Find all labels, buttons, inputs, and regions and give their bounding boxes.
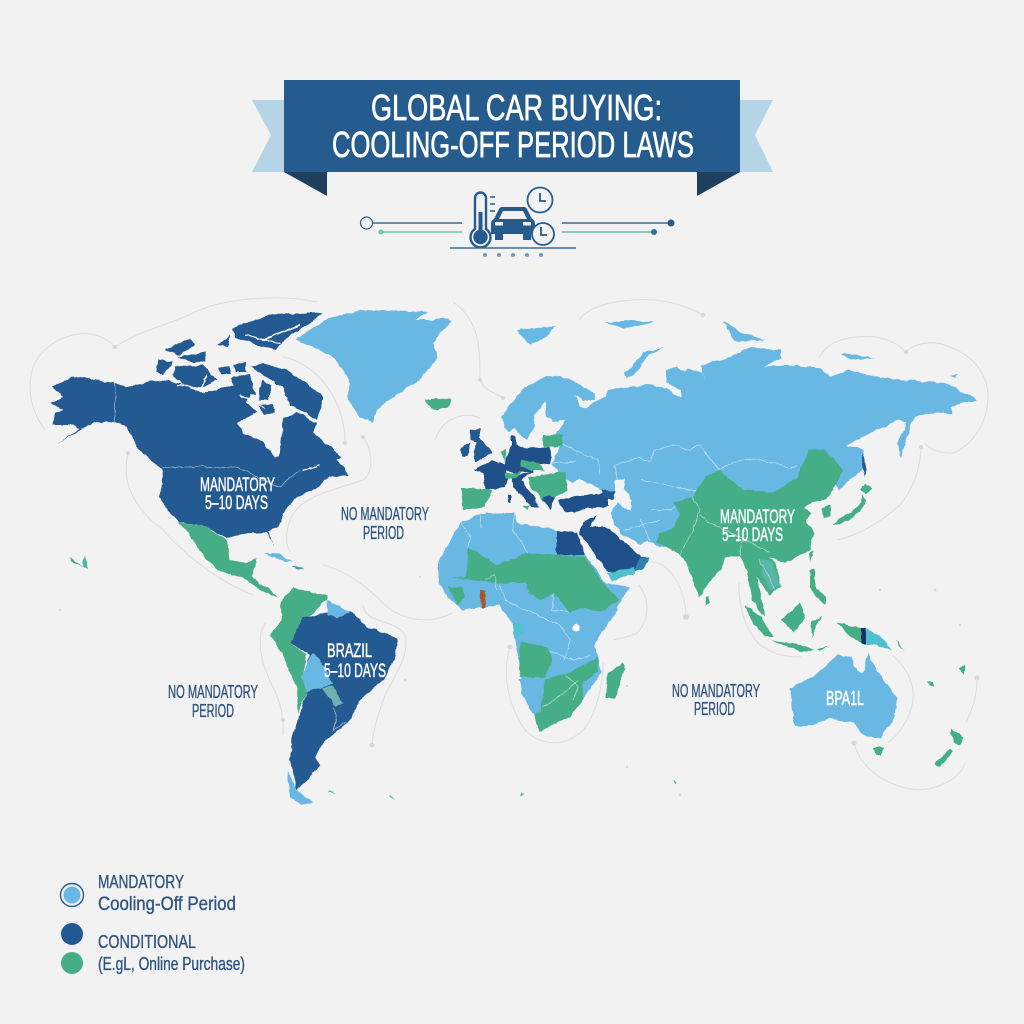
Southern Africa borders (543, 675, 578, 707)
map label: Brazil (324, 641, 386, 682)
specks in the oceans (59, 313, 980, 796)
Papua dark bar (861, 628, 866, 644)
Oman (634, 557, 650, 572)
map label: China: 5–10 DAYS (722, 525, 783, 546)
map label: Indian Ocean: PERIOD (694, 699, 735, 719)
ribbon tails (252, 100, 773, 172)
Germany and Poland (505, 443, 551, 473)
Sahel green band (452, 547, 619, 612)
ribbon folds (284, 172, 740, 196)
China, India and Southeast Asia (657, 450, 843, 617)
title line 2: COOLING-OFF PERIOD LAWS (332, 124, 694, 165)
map label: North Atlantic: NO MANDATORY (341, 504, 429, 524)
Yemen (607, 567, 635, 582)
Central Asia borders (552, 443, 797, 540)
Paraguay (322, 685, 343, 707)
icon: thermometer (470, 192, 495, 247)
map label: China: MANDATORY (720, 507, 795, 528)
icon: thermometer, car and clocks with timeline (360, 188, 674, 257)
world map (50, 310, 977, 805)
Central Africa teal (512, 622, 524, 637)
Uruguay divider (333, 708, 346, 730)
map label: Brazil: BRAZIL (327, 641, 372, 662)
timeline right (562, 220, 674, 235)
Australia (790, 653, 897, 738)
Caucasus (602, 490, 615, 500)
Scandinavia (501, 375, 595, 440)
Spain (461, 488, 492, 510)
legend item: mandatory: MANDATORY (98, 871, 184, 892)
coast gaps in Canada (177, 325, 320, 470)
Indochina tint (762, 560, 780, 590)
legend (60, 871, 245, 974)
icon: car (491, 207, 535, 240)
Caspian Sea (614, 478, 632, 510)
Denmark (511, 435, 516, 447)
base line and dots (450, 248, 576, 257)
legend item: mandatory: Cooling-Off Period (98, 893, 236, 915)
map label: Indian Ocean (672, 681, 760, 719)
Svalbard and Arctic islands (430, 318, 958, 378)
Iceland (425, 398, 451, 410)
Lake Victoria (572, 624, 580, 632)
map label: Australia: BPA1L (826, 688, 864, 710)
connector arcs around the map (30, 298, 988, 790)
France (474, 460, 508, 490)
icon: clock small (532, 223, 554, 245)
map label: North Atlantic: PERIOD (363, 523, 404, 543)
Caribbean islands (70, 553, 305, 570)
map label: North America: MANDATORY (200, 475, 275, 496)
Indonesia and Philippines (745, 568, 965, 686)
legend item: conditional: CONDITIONAL (98, 931, 196, 952)
Italy (512, 472, 539, 507)
Tasmania (874, 747, 883, 755)
Mexico and Central America (178, 522, 278, 598)
Bolivia (301, 653, 333, 692)
map label: Indian Ocean: NO MANDATORY (672, 681, 760, 701)
Central Europe and Balkans (505, 460, 568, 500)
map label: North America (200, 475, 275, 514)
Arabia (579, 515, 650, 572)
map label: China (720, 507, 795, 546)
Ghana stripe (480, 590, 486, 608)
map label: South Pacific: PERIOD (192, 701, 234, 721)
Turkey (559, 493, 608, 513)
map label: South Pacific (168, 682, 258, 721)
map label: North America: 5–10 DAYS (205, 493, 268, 514)
South Asia borders (680, 497, 775, 590)
Brazil and Argentina (290, 612, 398, 790)
icon: clock large (528, 188, 552, 212)
Pacific islands (82, 555, 677, 799)
legend item: conditional (61, 923, 196, 952)
Sardinia and Sicily (508, 495, 530, 510)
Africa borders (461, 513, 590, 660)
timeline left (360, 217, 462, 234)
Black Sea (568, 478, 600, 495)
Angola (519, 642, 552, 677)
North America (50, 313, 349, 547)
map label: South Pacific: NO MANDATORY (168, 682, 258, 702)
Patagonia (287, 770, 313, 805)
legend item: online purchase: (E.gL, Online Purchase) (98, 954, 245, 974)
Namibia (519, 679, 543, 713)
Greenland (295, 310, 452, 423)
Guianas (327, 600, 350, 618)
Greece and Balkans south (543, 497, 555, 510)
Egypt (557, 530, 585, 555)
Africa (439, 513, 630, 732)
map label: Brazil: 5–10 DAYS (324, 661, 386, 682)
title banner (252, 80, 773, 196)
Southern Africa (534, 657, 598, 732)
Canada and US border lines (115, 383, 300, 487)
New Zealand (934, 728, 964, 767)
West Africa green (448, 587, 465, 606)
UK and Ireland (460, 428, 492, 462)
Benelux and Baltics (500, 435, 563, 463)
Korea and Japan (705, 483, 873, 605)
legend item: online purchase (61, 952, 245, 974)
Russia and central Asia (552, 347, 977, 547)
Madagascar (606, 662, 625, 698)
Papua light (866, 628, 892, 651)
banner panel (284, 80, 740, 172)
legend item: mandatory (60, 871, 236, 915)
South America: north-west (270, 588, 327, 713)
Sakhalin (862, 452, 866, 478)
title line 1: GLOBAL CAR BUYING: (371, 87, 662, 128)
map label: North Atlantic (341, 504, 429, 543)
